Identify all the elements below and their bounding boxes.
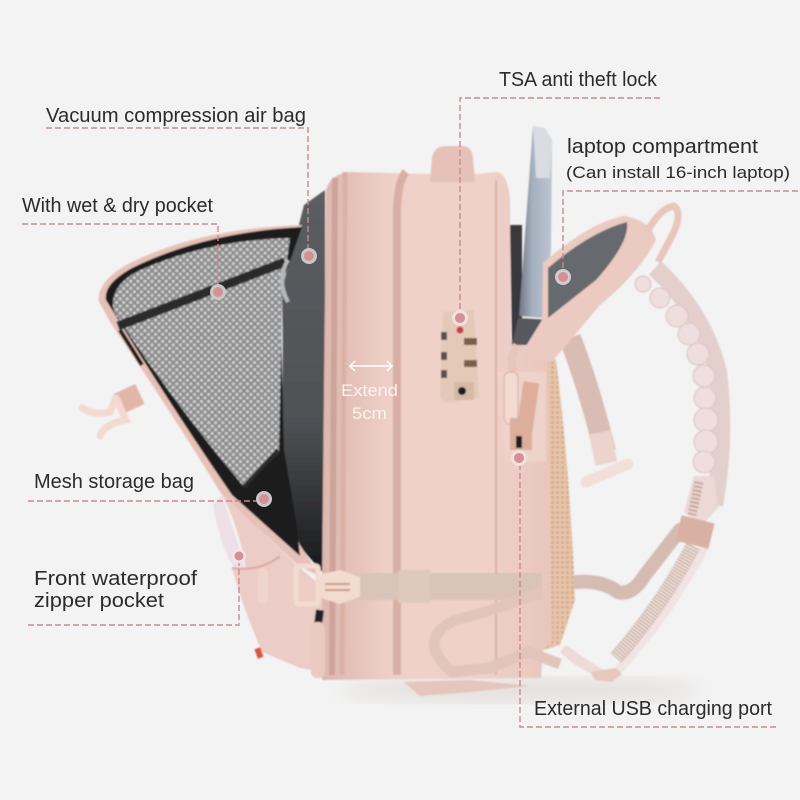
floor shadow [340,678,700,702]
callout: laptop compartment: laptop compartment [567,136,758,158]
USB port and zipper pulls [498,345,546,462]
shoulder strap: mesh lower [560,515,715,682]
callout: external USB charging port [511,450,776,727]
laptop compartment: back flap [512,206,678,362]
callout: TSA anti theft lock [452,69,660,326]
front buckle [296,566,360,604]
extend label: Extend [341,381,398,400]
callout: mesh storage bag [28,471,272,507]
upper webbing strap with tab [570,338,628,482]
top carry handle [430,146,475,182]
extend arrow [350,361,392,371]
callout: laptop compartment [555,136,798,285]
callout: wet and dry pocket: With wet & dry pocket [22,195,213,217]
laptop [510,126,552,345]
side buckle on flap [82,384,145,436]
shoulder strap: padded upper [635,268,721,525]
callout: mesh storage bag: Mesh storage bag [34,471,194,493]
callout: laptop compartment: (Can install 16-inch laptop) [566,163,790,182]
expansion zip seams [332,172,496,675]
open front flap with mesh lining [99,225,322,578]
lower zipper pull [311,610,325,678]
callout: TSA anti theft lock: TSA anti theft lock [499,69,658,91]
dark interior [276,190,325,575]
backpack illustration [82,126,721,696]
compression strap [355,570,560,696]
TSA combination lock [440,310,479,403]
callout: front waterproof zipper pocket: zipper pocket [34,590,164,612]
callout: wet and dry pocket [22,195,226,300]
callout: front waterproof zipper pocket [28,549,246,625]
front zipper pocket [222,494,326,672]
back mesh panel [543,355,575,650]
callout: front waterproof zipper pocket: Front waterproof [34,568,197,590]
extend label: 5cm [352,404,387,423]
extend label [341,381,398,423]
side water bottle [213,495,245,570]
callout: external USB charging port: External USB charging port [534,698,772,720]
main body [322,172,552,680]
callout: vacuum compression air bag: Vacuum compression air bag [46,105,306,127]
callout: vacuum compression air bag [46,105,317,264]
